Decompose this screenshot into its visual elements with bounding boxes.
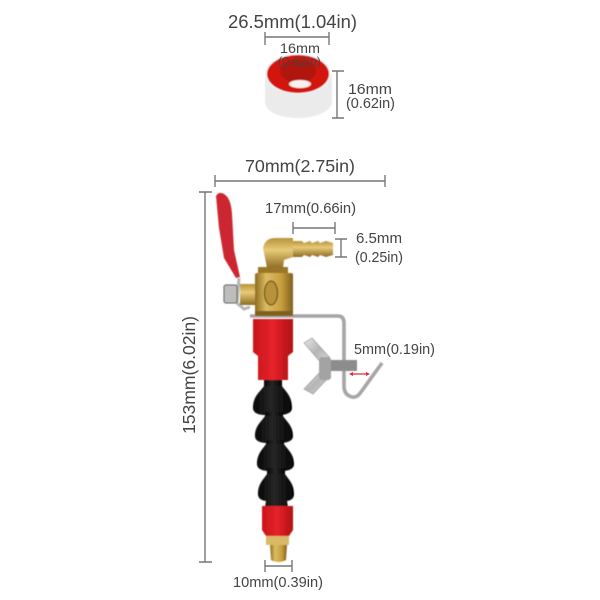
valve body	[255, 267, 293, 316]
tape inner diameter label: (0.62in)	[278, 54, 321, 69]
clamp opening dimension	[349, 342, 435, 376]
lock nut	[224, 285, 237, 303]
barb length dimension: 17mm(0.66in)	[265, 201, 356, 217]
black flexible hose segments	[253, 380, 294, 507]
overall width dimension: 70mm(2.75in)	[245, 156, 355, 176]
tape roll icon	[265, 54, 332, 118]
wing nut and bolt	[304, 338, 357, 394]
overall width dimension	[215, 156, 385, 187]
tape height dimension	[332, 71, 395, 118]
brass nozzle tip	[266, 536, 289, 562]
clamp opening dimension: 5mm(0.19in)	[354, 342, 435, 358]
brass stem	[240, 284, 258, 305]
nozzle diameter dimension	[233, 560, 323, 591]
overall height dimension	[179, 192, 212, 562]
tape height dimension: (0.62in)	[346, 96, 395, 112]
barb diameter dimension: (0.25in)	[355, 249, 403, 266]
mounting bracket	[250, 316, 382, 397]
tape inner diameter label	[278, 41, 321, 69]
overall height dimension: 153mm(6.02in)	[179, 316, 199, 434]
brass elbow	[263, 238, 293, 268]
barb diameter dimension	[335, 230, 403, 266]
tape outer diameter dimension: 26.5mm(1.04in)	[228, 11, 357, 32]
tape outer diameter dimension	[228, 11, 357, 45]
hose barb	[293, 241, 333, 257]
barb diameter dimension: 6.5mm	[356, 230, 402, 247]
lever clip	[237, 278, 250, 309]
valve and hose assembly	[216, 193, 382, 562]
barb length dimension	[265, 201, 356, 234]
red connector	[253, 319, 293, 380]
red lever handle	[216, 193, 240, 278]
nozzle diameter dimension: 10mm(0.39in)	[233, 575, 323, 591]
tape inner diameter label: 16mm	[280, 41, 320, 56]
red nozzle nut	[262, 506, 293, 536]
tape height dimension: 16mm	[348, 82, 392, 98]
